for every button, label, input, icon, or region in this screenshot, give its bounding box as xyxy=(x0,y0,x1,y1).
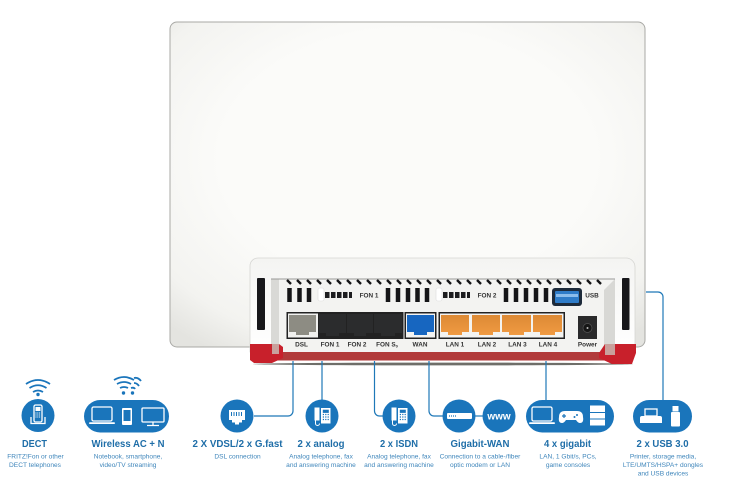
description: gigabit: LAN, 1 Gbit/s, PCs, xyxy=(539,454,597,460)
description: gigabit: game consoles xyxy=(546,462,591,469)
port labels: LAN 4 xyxy=(539,342,558,348)
FON 1 port xyxy=(319,314,346,336)
heading: 4 x gigabit: 4 x gigabit xyxy=(544,439,592,450)
heading: VDSL: 2 X VDSL/2 x G.fast xyxy=(192,439,283,450)
port labels: WAN xyxy=(413,342,428,348)
description: USB: and USB devices xyxy=(638,470,689,477)
feature: Gigabit-WAN xyxy=(440,400,521,469)
icon: notebook, smartphone, TV pill xyxy=(84,400,169,432)
port labels xyxy=(295,342,598,348)
left red foot xyxy=(250,344,283,363)
port labels: Power xyxy=(578,342,598,348)
icon: wifi signal xyxy=(26,380,50,396)
description: analog: and answering machine xyxy=(286,462,356,469)
feature: 2 x USB 3.0 xyxy=(623,400,704,477)
left vent grille xyxy=(257,278,265,330)
icon: www: www xyxy=(486,412,511,422)
feature: 2 x ISDN xyxy=(364,400,434,469)
port labels: LAN 3 xyxy=(508,342,527,348)
icon: DSL port xyxy=(220,400,254,432)
description: WAN: Connection to a cable-/fiber xyxy=(440,454,521,460)
description: DSL: DSL connection xyxy=(214,454,261,460)
description: Wireless: Notebook, smartphone, xyxy=(94,454,162,460)
port labels: FON S xyxy=(376,342,396,348)
USB key label: USB xyxy=(585,292,599,300)
description: USB: Printer, storage media, xyxy=(630,454,696,460)
WAN port xyxy=(404,312,436,339)
FON 2 key label: FON 2 xyxy=(478,292,497,300)
DSL port xyxy=(289,315,316,335)
heading: DECT: DECT xyxy=(22,439,48,450)
icon: modem xyxy=(442,400,476,432)
feature: DECT xyxy=(7,380,65,469)
description: USB: LTE/UMTS/HSPA+ dongles xyxy=(623,462,704,469)
heading: 2 x analog: 2 x analog xyxy=(298,439,344,450)
red base strip xyxy=(270,352,605,360)
vertical slots xyxy=(290,288,546,302)
FON 2 button xyxy=(436,288,470,301)
device shadow xyxy=(253,363,633,365)
LAN ports xyxy=(438,312,565,339)
icon: laptop, gamepad, NAS pill xyxy=(526,400,614,432)
port labels: FON 1 xyxy=(321,342,340,348)
description: ISDN: and answering machine xyxy=(364,462,434,469)
heading: Wireless AC + N: Wireless AC + N xyxy=(92,439,164,450)
icon: dual wifi signal xyxy=(114,377,141,395)
heading: 2 x ISDN: 2 x ISDN xyxy=(380,439,418,450)
description: DECT: FRITZ!Fon or other xyxy=(7,454,65,460)
description: analog: Analog telephone, fax xyxy=(289,454,354,460)
description: ISDN: Analog telephone, fax xyxy=(367,454,432,460)
connector lines xyxy=(254,292,663,416)
panel: white device back plate xyxy=(170,22,645,347)
description: Wireless: video/TV streaming xyxy=(100,462,157,469)
DSL and FON port frame xyxy=(286,312,404,339)
heading: Gigabit-WAN: Gigabit-WAN xyxy=(450,439,510,450)
top tick slots xyxy=(287,280,601,284)
feature: VDSL xyxy=(192,400,283,460)
icon: DECT handset xyxy=(22,399,54,432)
port labels: LAN 2 xyxy=(478,342,497,348)
FON 1 key label: FON 1 xyxy=(360,292,379,300)
feature: 4 x gigabit xyxy=(526,400,614,469)
port labels: DSL xyxy=(295,342,308,348)
power socket xyxy=(578,316,597,339)
heading: 2 x USB 3.0: 2 x USB 3.0 xyxy=(636,439,689,450)
recessed connector panel xyxy=(271,279,615,352)
feature: Wireless AC + N xyxy=(84,377,169,469)
FON 1 button xyxy=(318,288,352,301)
USB port xyxy=(552,288,582,306)
icon: analog telephone xyxy=(306,400,338,432)
port labels: LAN 1 xyxy=(446,342,465,348)
device body xyxy=(250,258,635,352)
description: WAN: optic modem or LAN xyxy=(450,462,510,469)
feature: 2 x analog xyxy=(286,400,356,469)
FON S0 port xyxy=(374,314,402,336)
icon: ISDN telephone xyxy=(382,400,416,432)
port labels: FON 2 xyxy=(348,342,367,348)
description: DECT: DECT telephones xyxy=(9,462,62,469)
FON 2 port xyxy=(347,314,373,336)
router device xyxy=(250,258,636,365)
icon: printer and USB stick pill xyxy=(633,400,692,432)
port labels: 0 xyxy=(396,344,399,348)
right vent grille xyxy=(622,278,630,330)
right red foot xyxy=(599,344,636,364)
